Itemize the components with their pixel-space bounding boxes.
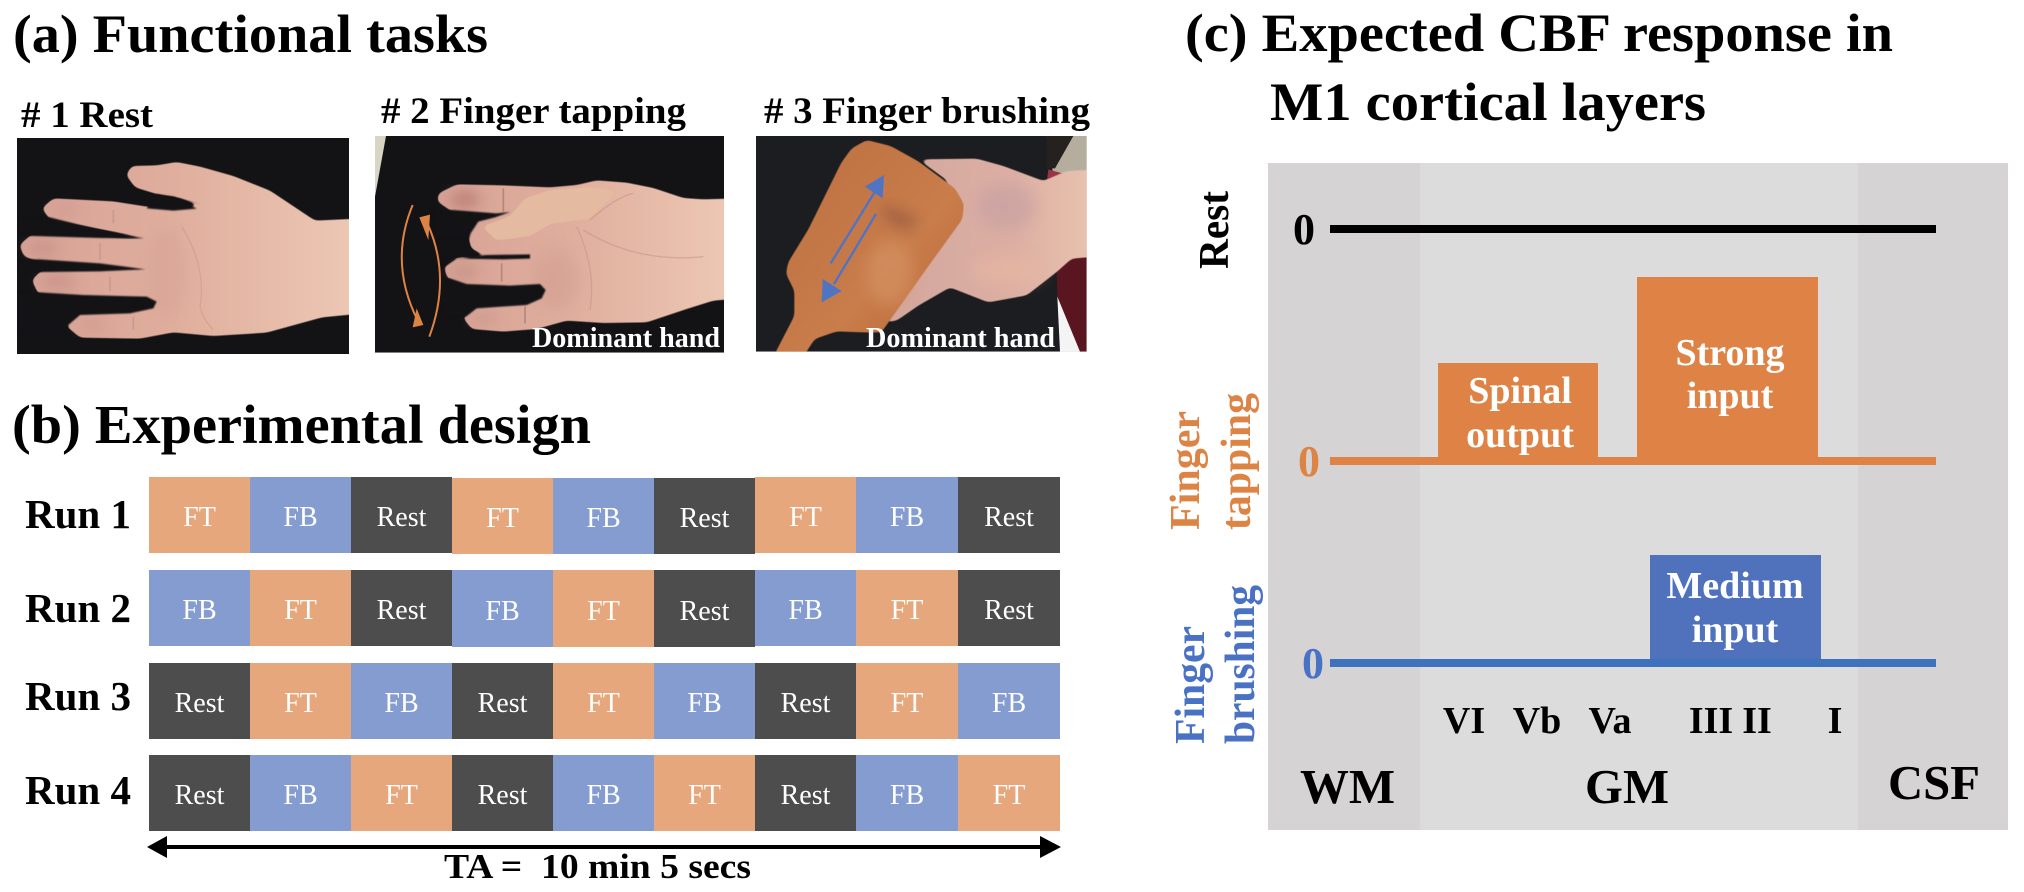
row: run 3: FB <box>384 688 419 719</box>
row: run 1: Rest <box>680 503 730 534</box>
heading: functional tasks: (a) Functional tasks <box>13 4 488 64</box>
photo: finger brushing hand <box>756 136 1103 357</box>
background corner <box>375 136 386 197</box>
photo: finger tapping hand <box>375 136 737 353</box>
row: run 1: FT <box>789 502 822 533</box>
chart: rest condition baseline: 0 <box>1293 205 1315 254</box>
label: finger brushing task: # 3 Finger brushing <box>764 91 1091 132</box>
row: run 4 <box>25 755 1060 831</box>
row: run 3: Rest <box>478 688 528 719</box>
chart: finger brushing response: Medium <box>1666 565 1804 607</box>
row: run 2: FT <box>284 595 317 626</box>
row: run 1: FB <box>586 503 621 534</box>
labels: cortical layers <box>1443 700 1842 742</box>
row: run 1: FB <box>890 502 924 533</box>
row: run 4: FB <box>890 780 924 811</box>
icon: brushing direction arrows <box>822 175 884 302</box>
panel: expected CBF response <box>1163 3 2008 830</box>
row: run 4: FB <box>586 780 621 811</box>
chart: finger tapping response: tapping <box>1214 393 1260 530</box>
label: dominant hand: Dominant hand <box>532 323 720 354</box>
labels: cortical layers: VI <box>1443 700 1485 742</box>
row: run 2: Rest <box>377 595 427 626</box>
labels: cortical layers: Va <box>1589 700 1631 742</box>
row: run 4: Run 4 <box>25 767 131 813</box>
row: run 2: FB <box>182 595 217 626</box>
label: total acquisition time: TA = 10 min 5 secs <box>444 847 751 886</box>
heading: expected CBF response <box>1185 3 1893 132</box>
row: run 4: FT <box>993 780 1025 811</box>
labels: tissue types: CSF <box>1888 755 1980 810</box>
row: run 3: FT <box>284 688 317 719</box>
row: run 2: FB <box>485 596 520 627</box>
icon: hair brush <box>773 140 964 357</box>
chart: finger tapping response: Finger <box>1163 411 1209 530</box>
labels: tissue types <box>1300 755 1980 814</box>
photo: open hand at rest <box>17 138 363 354</box>
label: finger tapping task: # 2 Finger tapping <box>381 91 687 132</box>
chart: rest condition baseline <box>1192 191 1936 269</box>
row: run 2: Rest <box>984 595 1034 626</box>
icon: tapping motion arrows <box>402 205 440 337</box>
row: run 3: FT <box>587 688 620 719</box>
chart: finger tapping response: Strong <box>1675 332 1785 374</box>
labels: cortical layers: I <box>1828 700 1842 742</box>
chart: finger tapping response: input <box>1687 375 1774 417</box>
chart: finger brushing response: Finger <box>1168 626 1214 744</box>
chart: tissue background bands <box>1268 163 2008 830</box>
row: run 4: Rest <box>478 780 528 811</box>
label: dominant hand: Dominant hand <box>866 323 1055 354</box>
row: run 4: FT <box>688 780 721 811</box>
row: run 1: FT <box>486 503 519 534</box>
chart: finger tapping response: output <box>1466 414 1574 456</box>
row: run 3: FB <box>992 688 1026 719</box>
labels: tissue types: GM <box>1585 759 1669 814</box>
finger gaps <box>433 210 546 317</box>
row: run 1: FB <box>283 502 318 533</box>
row: run 1: Run 1 <box>25 491 131 537</box>
heading: experimental design: (b) Experimental design <box>12 394 591 455</box>
panel: experimental design <box>12 394 1061 886</box>
row: run 4: Rest <box>781 780 831 811</box>
labels: cortical layers: III <box>1689 700 1733 742</box>
row: run 4: FB <box>283 780 318 811</box>
row: run 2: FB <box>788 595 823 626</box>
arrow: acquisition time span <box>147 836 1061 858</box>
label: rest task: # 1 Rest <box>21 95 154 136</box>
chart: finger brushing response: 0 <box>1302 639 1324 688</box>
chart: finger brushing response: brushing <box>1218 585 1264 744</box>
row: run 4: Rest <box>175 780 225 811</box>
chart: rest condition baseline: Rest <box>1192 191 1238 269</box>
row: run 1: Rest <box>377 502 427 533</box>
row: run 2 <box>25 570 1060 647</box>
row: run 1: Rest <box>984 502 1034 533</box>
row: run 3 <box>25 663 1060 739</box>
chart: finger tapping response: 0 <box>1298 437 1320 486</box>
row: run 2: Run 2 <box>25 585 131 631</box>
labels: tissue types: WM <box>1300 759 1395 814</box>
row: run 3: Rest <box>175 688 225 719</box>
finger gaps <box>28 193 198 328</box>
row: run 2: FT <box>587 596 620 627</box>
labels: cortical layers: Vb <box>1513 700 1561 742</box>
row: run 2: Rest <box>680 596 730 627</box>
labels: cortical layers: II <box>1742 700 1772 742</box>
row: run 3: FB <box>687 688 722 719</box>
heading: expected CBF response: M1 cortical layers <box>1270 72 1706 132</box>
row: run 4: FT <box>385 780 418 811</box>
heading: expected CBF response: (c) Expected CBF response in <box>1185 3 1893 63</box>
row: run 3: Run 3 <box>25 673 131 719</box>
row: run 2: FT <box>891 595 923 626</box>
row: run 3: Rest <box>781 688 831 719</box>
chart: finger brushing response <box>1168 555 1936 744</box>
chart: finger brushing response: input <box>1692 609 1779 651</box>
panel: functional tasks <box>13 4 1103 357</box>
row: run 1 <box>25 477 1060 554</box>
row: run 1: FT <box>183 502 216 533</box>
chart: finger tapping response <box>1163 277 1936 530</box>
chart: finger tapping response: Spinal <box>1468 370 1572 412</box>
row: run 3: FT <box>891 688 923 719</box>
